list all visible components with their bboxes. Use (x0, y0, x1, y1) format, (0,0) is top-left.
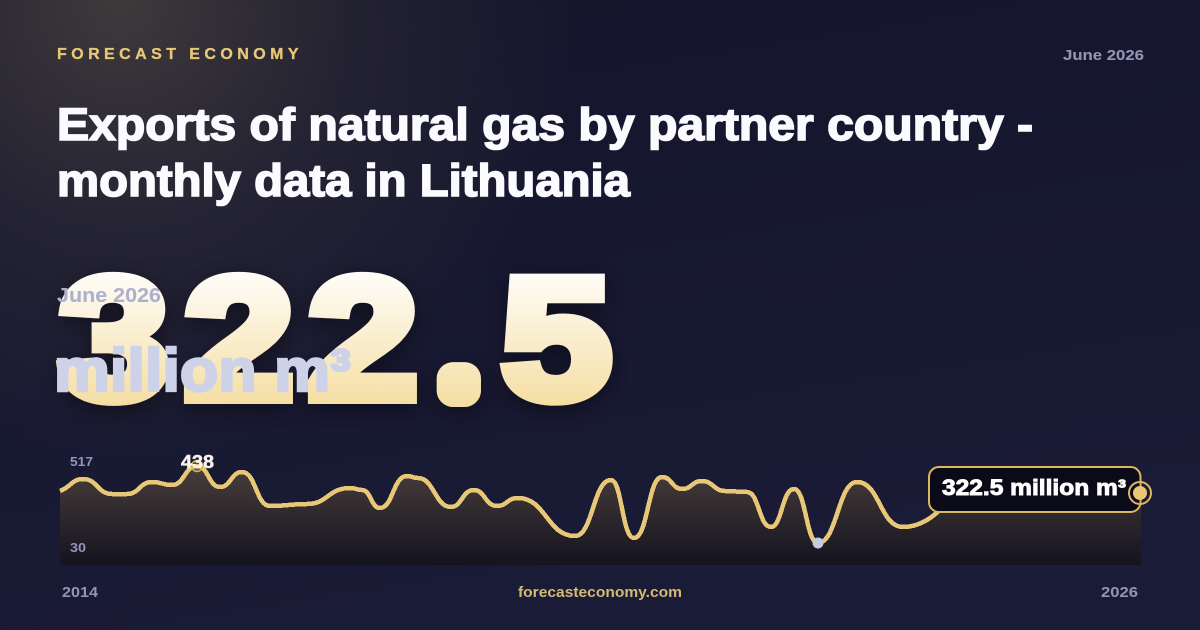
date top right: June 2026 (1063, 47, 1144, 64)
title: Exports of natural gas by partner country - (57, 99, 1033, 150)
unit label over value: million m³ (54, 337, 351, 404)
max marker (192, 460, 202, 472)
end year: 2026 (1101, 585, 1138, 601)
headline value (59, 243, 611, 435)
brand eyebrow: FORECAST ECONOMY (57, 46, 299, 63)
latest value marker (1129, 482, 1151, 504)
headline value: 3 (59, 243, 169, 435)
data line (60, 466, 1140, 543)
axis max label: 517 (70, 454, 93, 469)
period label over value: June 2026 (57, 285, 161, 307)
value callout (929, 467, 1140, 512)
headline value: 5 (501, 243, 611, 435)
headline value: 2 (308, 243, 418, 435)
title: monthly data in Lithuania (57, 155, 631, 206)
start year: 2014 (62, 585, 98, 601)
source: forecasteconomy.com (518, 585, 682, 601)
headline value: . (448, 318, 470, 408)
headline value: 2 (184, 243, 294, 435)
line chart (60, 452, 1151, 565)
axis min label: 30 (70, 540, 86, 555)
title (57, 99, 1033, 206)
max label: 438 (181, 452, 214, 472)
min marker (812, 538, 824, 548)
area under line (60, 466, 1141, 565)
value callout: 322.5 million m³ (942, 475, 1126, 500)
